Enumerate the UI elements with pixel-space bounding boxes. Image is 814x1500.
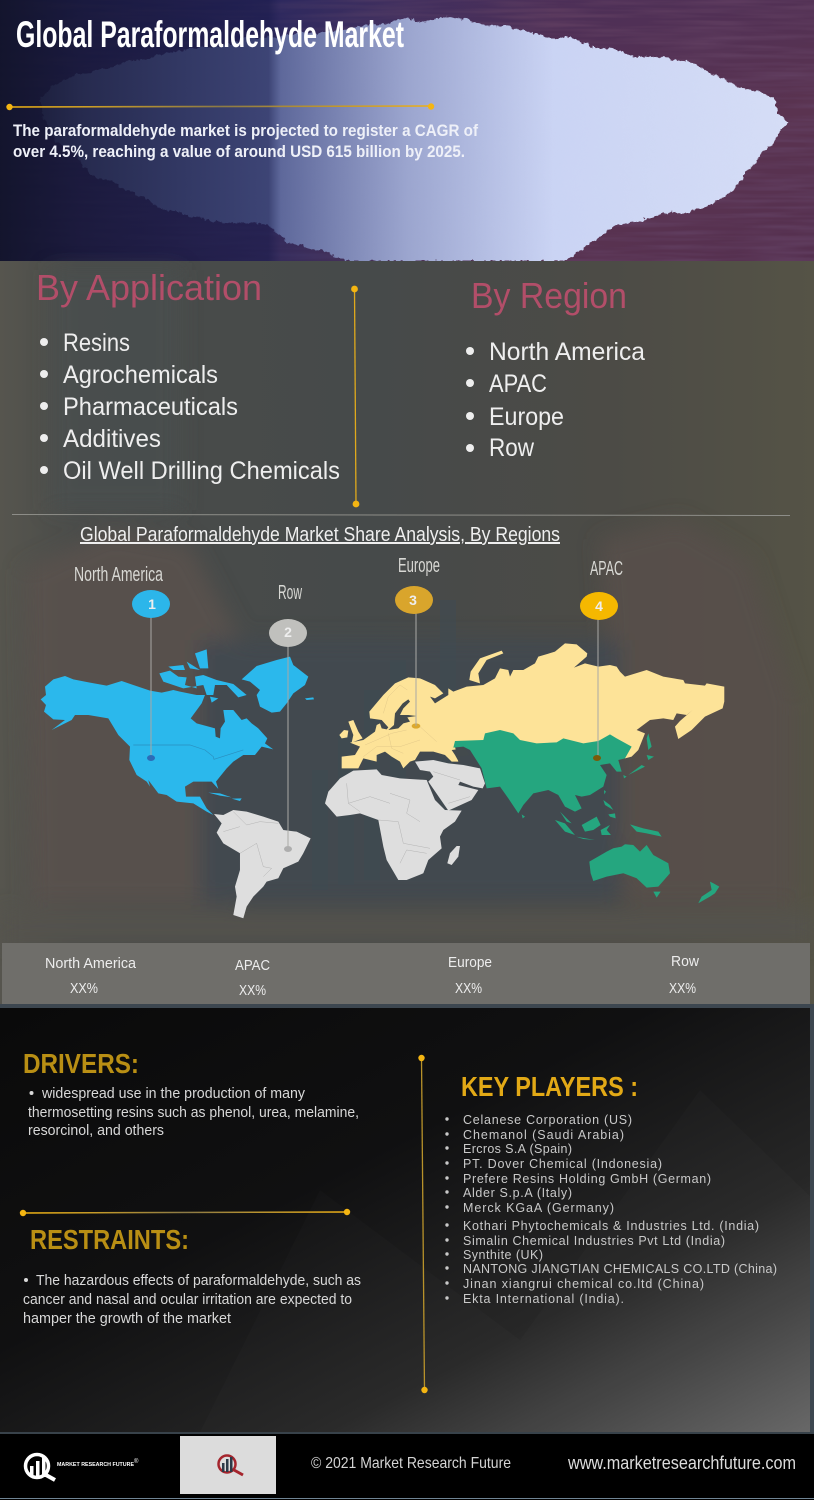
panel: segments and map background (0, 261, 814, 1008)
grey logo box (180, 1436, 276, 1494)
key players list: NANTONG JIANGTIAN CHEMICALS CO.LTD (China) (463, 1262, 777, 1276)
share table: North America (45, 955, 137, 972)
pin 4: apac (580, 558, 623, 761)
share table: XX% (70, 980, 98, 997)
pin 1: north america: 1 (148, 596, 156, 612)
share table: Row (671, 953, 699, 970)
gold divider (6, 103, 434, 110)
application list: Agrochemicals (63, 361, 218, 389)
pin 4: apac: APAC (590, 558, 623, 580)
gold divider (20, 1209, 350, 1216)
share table: XX% (239, 982, 266, 999)
application list: Oil Well Drilling Chemicals (63, 457, 340, 485)
copyright: © 2021 Market Research Future (311, 1455, 511, 1472)
panel: drivers, restraints, key players background (0, 1008, 814, 1432)
key players list: Prefere Resins Holding GmbH (German) (463, 1172, 711, 1186)
map: africa and middle east (325, 760, 485, 880)
pin 1: north america (74, 564, 170, 761)
key players list: Alder S.p.A (Italy) (463, 1186, 572, 1200)
hero summary text: over 4.5%, reaching a value of around USD 615 billion by 2025. (13, 143, 465, 161)
share table: Europe (448, 954, 492, 971)
application list (40, 329, 340, 485)
heading: restraints: RESTRAINTS: (30, 1224, 189, 1255)
registered mark: ® (134, 1458, 139, 1465)
region list: Row (489, 434, 535, 462)
panel: hero banner (0, 0, 814, 267)
application list: Additives (63, 425, 161, 453)
region list: North America (489, 338, 645, 366)
restraints text: cancer and nasal and ocular irritation are expected to (23, 1292, 352, 1308)
pin 3: europe (395, 555, 440, 726)
heading: by region: By Region (471, 275, 627, 316)
drivers text: resorcinol, and others (28, 1123, 164, 1139)
share table: XX% (669, 980, 696, 997)
restraints text: The hazardous effects of paraformaldehyde, such as (36, 1273, 361, 1289)
powder pile image (36, 17, 789, 267)
heading: drivers: DRIVERS: (23, 1048, 139, 1079)
map: north america (41, 649, 314, 815)
pin 2: row (269, 582, 307, 852)
key players list (445, 1113, 777, 1306)
restraints text (23, 1273, 361, 1327)
drivers text: widespread use in the production of many (41, 1086, 306, 1102)
panel: by application (36, 267, 340, 485)
share table (0, 943, 814, 1008)
pin 1: north america: North America (74, 564, 164, 586)
icon: colour logo (218, 1456, 243, 1475)
application list: Resins (63, 329, 130, 357)
vertical gold divider (351, 286, 359, 507)
chart title: Global Paraformaldehyde Market Share Analysis, By Regions (80, 524, 560, 546)
key players list: Merck KGaA (Germany) (463, 1201, 614, 1215)
region list: Europe (489, 403, 564, 431)
key players list: Simalin Chemical Industries Pvt Ltd (India) (463, 1234, 725, 1248)
panel: restraints (23, 1224, 361, 1327)
key players list: Synthite (UK) (463, 1248, 543, 1262)
world map (41, 643, 724, 918)
key players list: Celanese Corporation (US) (463, 1113, 632, 1127)
pin 4: apac: 4 (595, 598, 603, 614)
pin 3: europe: 3 (409, 592, 417, 608)
vertical gold divider (418, 1055, 428, 1393)
heading: by application: By Application (36, 267, 262, 308)
region list (466, 338, 645, 462)
share table: XX% (455, 980, 482, 997)
website: www.marketresearchfuture.com (567, 1453, 796, 1473)
key players list: Jinan xiangrui chemical co.ltd (China) (463, 1277, 704, 1291)
region list: APAC (489, 370, 547, 398)
logo wordmark: MARKET RESEARCH FUTURE (57, 1462, 134, 1468)
application list: Pharmaceuticals (63, 393, 238, 421)
hero title: Global Paraformaldehyde Market (16, 14, 404, 55)
pin 2: row: Row (278, 582, 302, 604)
panel: by region (466, 275, 645, 462)
restraints text: hamper the growth of the market (23, 1311, 231, 1327)
drivers text: thermosetting resins such as phenol, urea, melamine, (28, 1105, 359, 1121)
icon: white logo (26, 1454, 55, 1480)
key players list: Chemanol (Saudi Arabia) (463, 1128, 624, 1142)
drivers text (28, 1086, 359, 1139)
map: south america (214, 810, 311, 918)
pin 2: row: 2 (284, 624, 292, 640)
key players list: Ekta International (India). (463, 1292, 624, 1306)
share table: APAC (235, 957, 270, 974)
key players list: Kothari Phytochemicals & Industries Ltd. (India) (463, 1219, 759, 1233)
pin 3: europe: Europe (398, 555, 440, 577)
footer (0, 1432, 814, 1500)
key players list: Ercros S.A (Spain) (463, 1142, 572, 1156)
key players list: PT. Dover Chemical (Indonesia) (463, 1157, 662, 1171)
map: europe and russia (339, 643, 724, 768)
panel: drivers (23, 1048, 359, 1139)
heading: key players: KEY PLAYERS : (461, 1071, 638, 1102)
hero summary text: The paraformaldehyde market is projected to register a CAGR of (13, 122, 478, 140)
map: asia pacific (452, 730, 719, 903)
panel: key players (445, 1071, 777, 1306)
hero summary text (13, 122, 478, 161)
